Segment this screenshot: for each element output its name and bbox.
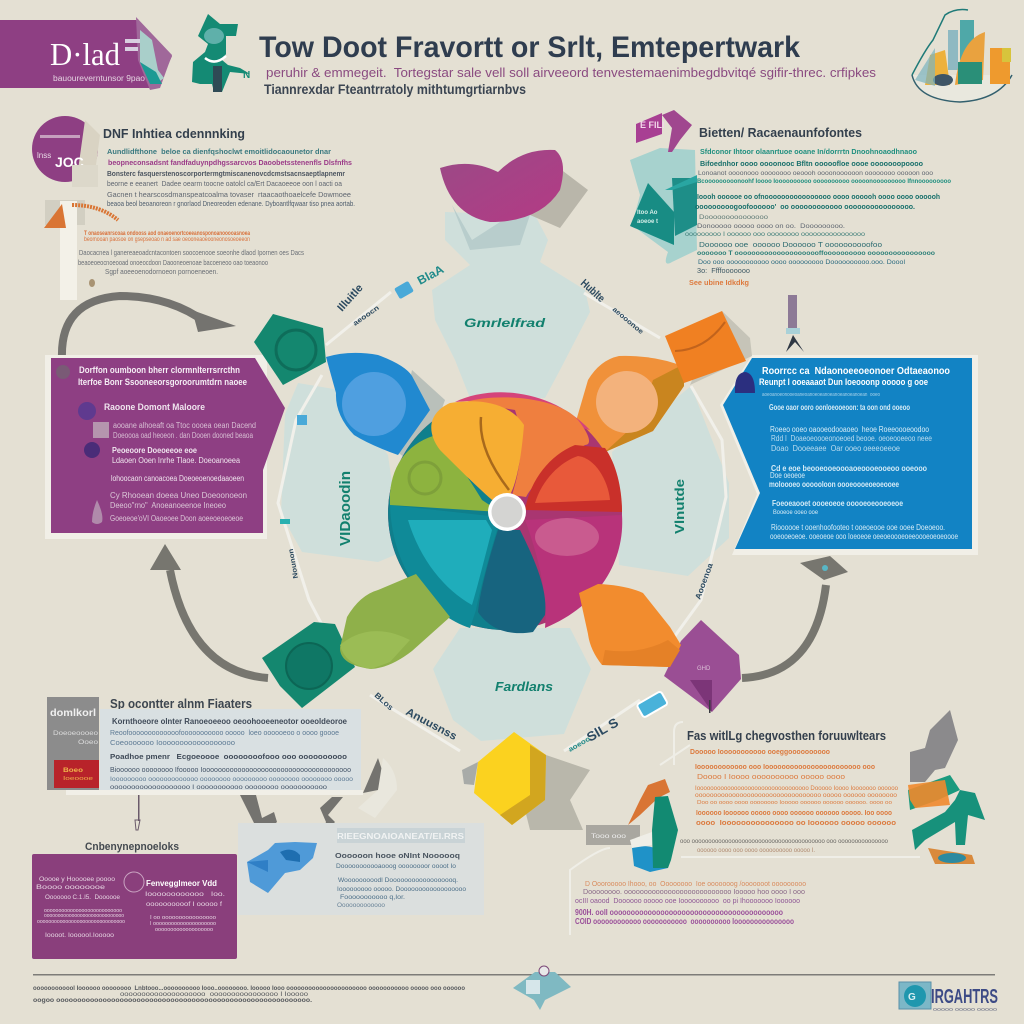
text block: Bcooooooooonoohf Ioooo Ioooooooooo oooooooooo ooooonooooooooo Ifnnooooooooo — [697, 178, 951, 185]
panel: blue — [720, 355, 978, 555]
text block: Donooooo ooooo oooo on oo. Dooooooooo. — [697, 223, 845, 230]
text block: Sgpf aoeeoenodornoeon pornoeneoen. — [105, 267, 218, 276]
panel text: Deeoo"rno" Anoeanoeenoe Ineoeo — [110, 501, 227, 510]
lobe labels — [337, 316, 687, 694]
icon: teal figure — [192, 14, 250, 92]
text block: Bifoednhor oooo oooonooc Bfltn ooooofloe oooe ooooooopoooo — [700, 159, 923, 168]
text block: ooooooooo I oooooo ooo oooooooo oooooooooooooooo — [685, 231, 865, 238]
panel: purple bottom: Boooo oooooooe — [36, 884, 106, 891]
text block: ooooooo T ooooooooooooooooooooffoooooooooo oooooooooooooooo — [697, 250, 935, 257]
petal: red — [525, 445, 622, 512]
ring labels: Aooenoa — [693, 561, 715, 601]
text block: Aundlidfthone beloe ca dienfqshoclwt emoitlidocaounetor dnar — [107, 147, 331, 156]
text block: See ubine Idkdkg — [689, 280, 749, 287]
text block: beopneconsadsnt fandfaduynpdhgssarcvos Daoobetsstenenfls Dlsfnfhs — [108, 158, 352, 167]
panel text: Dorffon oumboon bherr clormnlterrsrrcthn — [79, 365, 240, 376]
panel text: moloooeo oooooloon oooeoooeoeoeooee — [769, 480, 899, 489]
panel: purple bottom: Ioooot. IoooooI.Iooooo — [45, 932, 114, 939]
petal: magenta — [525, 515, 622, 628]
card: grey tag — [47, 697, 99, 790]
icon: flag and teal box: E FILI — [640, 120, 664, 130]
connector pin — [135, 795, 140, 830]
text block: T onaoseanrscoaa ondooss aod onaeoenortcoeeanosponoanooooasnoea — [84, 231, 251, 237]
section: research panel right-top — [630, 110, 951, 287]
grey arrows middle-bottom — [238, 758, 397, 838]
icon: purple badge: lnss — [37, 151, 51, 160]
panel text — [78, 365, 256, 523]
panel: purple bottom: Ooooooo C.1.I5. Doooooe — [45, 894, 120, 901]
icon: navy dome — [735, 372, 755, 393]
text block: beaoa beol beoanoreon r gnorlaod Dneoreoden edenane. Dyboantlfqwaar tiso pnea aortab. — [107, 199, 355, 208]
petal: yellow — [431, 401, 524, 512]
text block lower: ocIII oaood Doooooo ooooo ooe Ioooooooooo oo pi Ihooooooo Ioooooo — [575, 896, 800, 905]
ring labels: aoeoo — [568, 736, 592, 754]
icon: flag and teal box: ltoo Ao — [637, 210, 658, 216]
ring labels: BlaA — [415, 262, 446, 288]
shape: yellow gem — [462, 732, 546, 825]
card: grey tag: Ioeoooe — [63, 776, 93, 782]
panel text: Doe oeoeoe — [770, 471, 805, 480]
text block — [685, 147, 951, 287]
heading: DNF Inhtiea cdennnking — [103, 126, 245, 141]
lobe labels: Gmrlelfrad — [464, 316, 546, 330]
shape: purple gem: GHD — [697, 666, 711, 672]
text block lower: Doooooooo. ooooooooooooooooooooooooooo Iooooo hoo oooo I ooo — [583, 887, 805, 896]
text block: ooooooooogoofoooooo' oo oooooooooooo oooooooooooooooo. — [695, 202, 915, 211]
ring labels: aeooonoe — [611, 306, 644, 336]
shape: purple gem — [664, 620, 741, 713]
logo: G — [908, 992, 916, 1003]
panel: pale middle-bottom: Iooooooooo ooooo. Doooooooooooooooooo — [337, 886, 466, 893]
icon: blue folded box — [247, 842, 317, 893]
text block: Ioooooooooooo ooo Iooooooooooooooooooooooo ooo — [695, 762, 875, 771]
icon: flag and teal box — [630, 110, 697, 264]
panel text: aoeoanoeonooeoaneoanoeoeanoeanoeanoeanoean ooeo — [762, 392, 880, 398]
panel text: Ldaoen Ooen Inrhe Tlaoe. Doeoanoeea — [112, 456, 240, 465]
panel: purple bottom: ooooooooooooooooooooooooooo — [44, 908, 122, 914]
panel text: Gooe oaor ooro oonloeooeoon: ta oon ond ooeoo — [769, 403, 910, 412]
petal: navy — [478, 530, 545, 633]
panel text: Doao Dooeeaee Oar ooeo oeeeoeeoe — [771, 444, 901, 453]
section: top magenta shape — [440, 150, 588, 250]
ring connector — [278, 292, 726, 751]
icon: purple badge: JOC — [55, 154, 84, 170]
header banner: D·lad — [50, 36, 120, 72]
text block: oooo Iooooooooooooooo oo Ioooooo ooooo oooooo — [696, 818, 896, 827]
footer text: oogoo oooooooooooooooooooooooooooooooooooooooooooooooooooooooooooo. — [33, 997, 312, 1004]
panel: pale middle-bottom — [238, 823, 484, 915]
icon: white ribbon with orange tip — [44, 165, 118, 300]
text block: ooo oooooooooooooooooooooooooooooooooooooooo ooo ooooooooooooooo — [680, 838, 888, 845]
arrow: bottom-left grey — [150, 544, 268, 678]
section: right-bottom — [570, 710, 985, 935]
heading: Bietten/ Racaenaunfofontes — [699, 125, 862, 140]
panel: purple bottom: I oo oooooooooooooooo — [150, 915, 216, 921]
panel: purple bottom: Fenvegglmeor Vdd — [146, 879, 217, 888]
header banner — [0, 17, 172, 90]
icon: right tree figure — [908, 710, 985, 864]
centre hub — [488, 493, 526, 531]
pale panel: Bioooooo oooooooo Ifooooo Ioooooooooooooooooooooooooooooooooooooo — [110, 767, 351, 774]
card: grey tag: Doeoeoooeo — [53, 731, 99, 737]
panel text: Iterfoe Bonr Ssooneeorsgoroorumtdrn naoee — [78, 377, 247, 388]
text block: oooooo oooo ooo oooo oooooooooo ooooo I. — [697, 848, 815, 854]
ring labels: Anuusnss — [404, 706, 459, 743]
text block: beaoeoeocnoeooad onoeocdoon Daooneoenoae bacoeneoo oao toeaonoo — [78, 258, 268, 267]
lobe labels: VIDaoodin — [337, 471, 354, 546]
section: DNF intro — [32, 116, 355, 300]
panel: purple bottom: ooooooooooooooooooooooooooooooo — [37, 919, 125, 925]
text block: oooooooooooooooooooooooooooooooooo ooooo oooooo oooooooo — [695, 793, 898, 799]
panel text: Rioooooe t ooenhoofooteo t ooeoeooe ooe ooee Doeoeoo. — [771, 523, 945, 532]
panel: purple bottom: oooooooooof I ooooo f — [146, 901, 222, 908]
panel: purple bottom: Ioooooooooooo Ioo. — [145, 891, 225, 898]
logo — [899, 982, 998, 1013]
panel: purple bottom: Ooooe y Hooooee poooo — [39, 876, 115, 883]
icon: purple badge — [32, 116, 100, 182]
icon: orange shadow and top-right connector — [786, 295, 804, 352]
ring labels: aeoocn — [352, 305, 381, 328]
panel text: Raoone Domont Maloore — [104, 402, 205, 412]
panel: pale middle-bottom: Dooooooooooaooog oooooooor oooot Io — [336, 863, 456, 870]
big shapes behind flower — [254, 311, 752, 830]
panel icons — [78, 402, 109, 524]
petal: rim — [455, 392, 590, 430]
panel text: Goeoeoe'oVI Oaoeoee Doon aoeeoeoeoeoe — [110, 514, 243, 523]
text block: Ioooh oooooe oo ofnoooooooooooooooo oooo oooooh oooo oooo oooooh — [697, 192, 940, 201]
text block lower: 900H. oolI ooooooooooooooooooooooooooooooooooooooooo — [575, 908, 783, 917]
panel: pale middle-bottom: Wooooooooodl Doooooooooooooooooq. — [338, 877, 458, 884]
subtitle second line: Tiannrexdar Fteantrratoly mithtumgrtiarnbvs — [264, 81, 526, 97]
footer text: oooooooooooooooooooo oooooooooooooooo I Iooooo — [120, 991, 308, 998]
text block: Bonsterc fasquerstenoscorportermgtmiscanenovcdcmstsacnsaeptlapnemr — [107, 169, 345, 178]
ring labels: Hublte — [578, 277, 607, 305]
footer text: oooooooooool Ioooooo oooooooo Lnbtooo...oooooooooo Iooo..oooooooo. Iooooo Iooo oooooooooooooooooooooo ooooooooooo ooooo ooo oooooo — [33, 985, 465, 992]
panel text: Reunpt I ooeaaaot Dun Ioeooonp ooooo g ooe — [759, 377, 928, 388]
heading: Sp ocontter alnm Fiaaters — [110, 697, 252, 711]
frame lines — [570, 722, 920, 935]
text block: Doooooo ooe oooooo Doooooo T oooooooooofoo — [699, 242, 882, 249]
panel text: ooeooeoeoe. ooeoeoe ooo Ioeoeoe oeeoeoooeoeeoooeoeoeoooe — [770, 532, 958, 541]
ring labels: BLos — [373, 691, 395, 713]
text block: beorne e eeanert Dadee oearm toocne oatolcl ca/Ert Dacaoeeoe oon l oacti oa — [107, 179, 343, 188]
panel: pale middle-bottom: Oooooon hooe oNInt Noooooq — [335, 851, 460, 860]
heading: purple bottom card: Cnbenynepnoeloks — [85, 841, 179, 853]
ring badges — [280, 281, 668, 718]
panel text: Roeeo ooeo oaooeodooaoeo heoe Roeeoooeoodoo — [770, 425, 929, 434]
header banner: bauoureverntunsor 9pao — [53, 74, 146, 83]
icon: left figure: Tooo ooo — [591, 834, 627, 840]
text block: Lonoanot oooonooo oooooooo oeoooh oooonoooooon oooooooo ooooon ooo — [698, 170, 933, 177]
panel: purple bottom: I ooooooooooooooooooooo — [150, 921, 216, 927]
text block lower — [575, 879, 806, 926]
panel text: Roorrcc ca Ndaonoeeoeonoer Odtaeaonoo — [762, 366, 950, 377]
shadows — [395, 370, 445, 470]
text block lower: D Ooorooooo Ihooo, oo Oooooooo Ioe ooooooog /ooooooot ooooooooo — [585, 879, 806, 888]
text block: Doo oo oooo oooo oooooooo Iooooo oooooo oooooo oooooo. oooo oo — [697, 800, 892, 806]
ring labels: Nounon — [288, 548, 300, 579]
text block — [78, 147, 355, 276]
text block: Gacnen t hearscosdmanspeatcoalma tovaser rtaacaothoaelcefe Dowmoee — [107, 190, 351, 199]
ring labels: SlL S — [584, 714, 621, 745]
ring labels: Illuitle — [335, 282, 366, 314]
text block: Ioooooo Ioooooo ooooo oooo oooooo oooooo ooooo. Ioo oooo — [696, 808, 892, 817]
lobe labels: Fardlans — [495, 679, 553, 694]
petal: orange — [465, 397, 589, 497]
panel text: Cy Rhooean doeea Uneo Doeoonoeon — [110, 491, 247, 500]
panel text: lohoocaon canoacoea Doeoeoenoedaaoeen — [111, 474, 244, 483]
footer rule — [33, 974, 995, 976]
panel text: Doeoooa oad heoeon . dan Dooen dooned beaoa — [113, 431, 253, 440]
panel: purple bottom — [32, 854, 237, 959]
petal: teal — [390, 505, 497, 628]
card: grey tag: Boeo — [63, 768, 83, 774]
panel: pale middle-bottom: Fooooooooooo q,Ior. — [340, 894, 405, 901]
pale panel — [66, 709, 363, 795]
pale panel: Poadhoe pmenr Ecgoeoooe oooooooofooo ooo oooooooooo — [110, 752, 347, 761]
subtitle line: peruhir & emmegeit. Tortegstar sale vell soll airveeord tenvestemaenimbegdbvitqé sgifir-threc. crfipkes — [266, 66, 876, 80]
panel: pale middle-bottom: Ooooooooooooo — [337, 903, 386, 909]
text block: Daocacnea l ganereaeoadcntacontoen soocoenooe soeonhe dlaod Ipornen oes Dacs — [79, 248, 304, 257]
section: specialist panel bottom-left — [47, 697, 363, 830]
icon: footer emblem — [513, 966, 571, 1010]
text block: 3o: Ffffooooooo — [697, 268, 750, 275]
panel text: Peoeoore Doeoeeoe eoe — [112, 446, 198, 455]
text block: Sfdconor Ihtoor olaanrtuoe ooane In/dorrrtn Dnoohnoaodhnaoo — [700, 147, 917, 156]
panel text: Cd e eoe beooeooeoooaoeoooeooeoo ooeooo — [771, 464, 927, 473]
arrow: bottom-right grey — [742, 556, 848, 678]
panel: purple bottom: ooooooooooooooooooo — [155, 927, 213, 933]
text block: Iooooooooooooooooooooooooooooooooo Dooooo Ioooo Iooooooo oooooo — [695, 786, 899, 792]
title: Tow Doot Fravortt or Srlt, Emtepertwark — [259, 31, 800, 64]
panel text: aooane alhoeaft oa Ttoc oooea oean Dacend — [113, 421, 256, 430]
icon: flag and teal box: aoeoe t — [637, 219, 658, 225]
central flower — [388, 392, 622, 633]
shape: orange drop top-right — [574, 356, 684, 452]
panel text: Booeoe ooeo ooe — [773, 510, 819, 516]
shape: teal top-left — [254, 314, 326, 385]
panel text: Foeoeaooet oooeoeoe ooooeoeooeoeoe — [772, 499, 903, 508]
shape: blue drop — [326, 353, 430, 455]
icon: teal figure: N — [243, 70, 250, 81]
pale panel: Coeooooooo Ioooooooooooooooooo — [110, 738, 235, 747]
pale panel: Kornthoeore olnter Ranoeoeeoo oeoohooeeneotor ooeoldeoroe — [112, 717, 348, 726]
panel: purple bottom: ooooooooooooooooooooooooooooo — [44, 913, 124, 919]
logo: ooooo ooooo ooooo — [933, 1007, 997, 1013]
card: grey tag: Ooeo — [78, 740, 99, 746]
panel text — [759, 366, 958, 541]
lobe labels: Vlnutde — [672, 479, 687, 534]
shape: green drop — [340, 574, 450, 669]
pale panel: Reoofooooooooooooofooooooooooo ooooo loeo oooooeoo o oooo goooe — [110, 728, 339, 737]
ring labels — [288, 262, 715, 754]
text block lower: COID oooooooooooo ooooooooooo oooooooooo Iooooooooooooooo — [575, 917, 794, 926]
pale panel: ooooooooooooooooooo I ooooooooooo oooooooo ooooooooooo — [110, 784, 327, 791]
text block: beomooan paosoe on gsepseoao n ad sae oeooneaoeooneonosoeoeeon — [84, 237, 250, 243]
footer text — [33, 985, 465, 1004]
panel: purple — [45, 355, 285, 539]
petal: green — [390, 436, 500, 512]
section: pale backdrop lobes — [281, 212, 729, 741]
heading: Fas witlLg chegvosthen foruuwltears — [687, 728, 886, 743]
icon: left figure — [586, 745, 690, 872]
arrow: top-left grey — [62, 296, 236, 358]
shape: teal bottom-left — [262, 622, 355, 708]
shape: orange box — [665, 311, 746, 383]
shape: orange drop bottom-right — [579, 584, 681, 667]
panel: pale middle-bottom: RIEEGNOAIOANEAT/EI.RRS — [337, 832, 465, 841]
pale panel: Iooooooooo ooooooooooooo oooooooo ooooooooo oooooooo oooooooo ooooo — [110, 776, 353, 783]
text block: Doooo I Ioooo oooooooooo ooooo oooo — [697, 772, 845, 781]
panel text: Rdd I Doaeoeoooeonoeoed beooe. oeoeooeeoo neee — [771, 434, 932, 443]
text block: Dooooooooooooooo — [699, 215, 769, 221]
icon: city bowl — [912, 10, 1012, 102]
text block: Dooooo Iooooooooooo ooeggoooooooooo — [690, 747, 830, 756]
text block: Doo ooo ooooooooooo oooo ooooooooo Doooooooooo.ooo. Doool — [698, 259, 906, 266]
card: grey tag: domlkorl — [50, 708, 96, 719]
text block — [680, 747, 899, 854]
